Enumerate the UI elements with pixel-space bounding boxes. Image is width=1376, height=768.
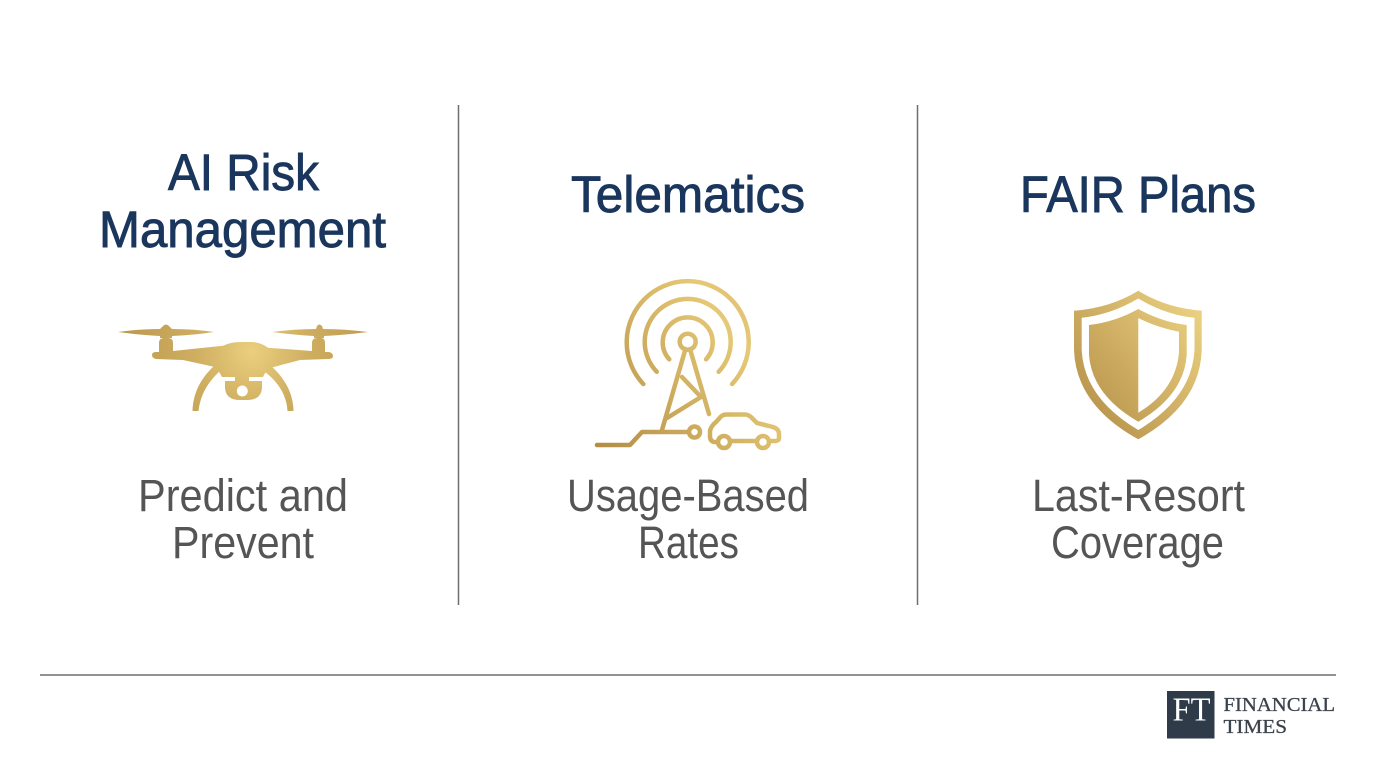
heading: AI Risk Management: AI Risk (168, 144, 319, 201)
text: Predict and Prevent: Prevent (172, 517, 314, 568)
panel: FAIR Plans (1020, 166, 1256, 568)
heading: AI Risk Management (99, 144, 386, 258)
text: Last-Resort Coverage: Coverage (1051, 517, 1224, 568)
logo: Financial Times (1167, 691, 1335, 738)
icon: signal tower and car (597, 281, 779, 448)
text: Usage-Based Rates: Rates (638, 517, 739, 568)
text: Usage-Based Rates (567, 470, 809, 568)
logo wordmark: FINANCIAL (1224, 694, 1335, 716)
text: Predict and Prevent (138, 470, 348, 568)
icon: drone (118, 324, 368, 411)
panel: Telematics (567, 166, 809, 568)
text: Predict and Prevent: Predict and (138, 470, 348, 521)
panel: AI Risk Management (99, 144, 386, 568)
logo wordmark: TIMES (1224, 716, 1287, 738)
icon: shield (1074, 291, 1202, 439)
heading: Telematics: Telematics (571, 166, 805, 223)
text: Last-Resort Coverage (1032, 470, 1245, 568)
text: Last-Resort Coverage: Last-Resort (1032, 470, 1245, 521)
heading: FAIR Plans: FAIR Plans (1020, 166, 1256, 223)
logo wordmark (1224, 694, 1335, 738)
logo mark: FT (1167, 691, 1214, 738)
heading: AI Risk Management: Management (99, 201, 386, 258)
logo mark: FT: FT (1172, 692, 1211, 728)
text: Usage-Based Rates: Usage-Based (567, 470, 809, 521)
